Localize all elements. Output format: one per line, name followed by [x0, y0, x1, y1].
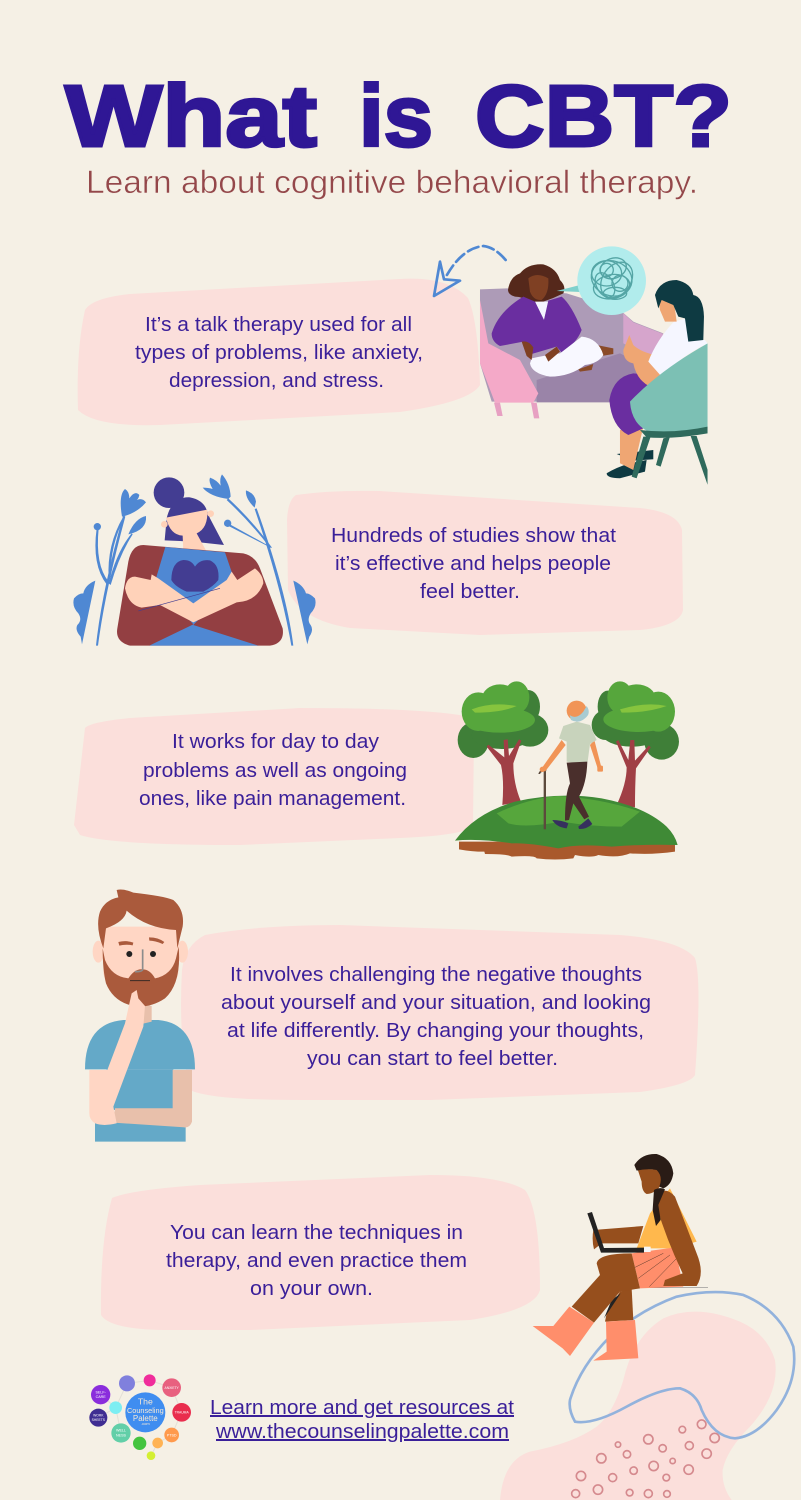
right tree	[592, 681, 679, 807]
title: CBT?	[475, 68, 732, 165]
panel: day to day problems: problems as well as ongoing	[143, 760, 407, 782]
icon: therapy session illustration	[434, 246, 708, 485]
panel: learn techniques	[101, 1175, 540, 1330]
man with cane	[538, 701, 603, 829]
icon: thinking bearded man	[85, 890, 195, 1142]
panel: challenging thoughts: about yourself and your situation, and looking	[221, 992, 651, 1014]
title	[65, 68, 732, 165]
link text: Learn more and get resources at	[210, 1397, 514, 1419]
logo: The Counseling Palette: WORK	[93, 1414, 104, 1418]
plants	[73, 474, 316, 646]
title: is	[359, 68, 433, 165]
subtitle: Learn about cognitive behavioral therapy.	[86, 164, 698, 200]
icon: dashed arrow	[434, 246, 506, 296]
therapist	[607, 280, 708, 485]
panel: effectiveness: feel better.	[420, 581, 520, 603]
left tree	[458, 681, 548, 805]
sofa	[480, 288, 663, 418]
panel: effectiveness: Hundreds of studies show that	[331, 525, 616, 547]
panel: challenging thoughts: It involves challenging the negative thoughts	[230, 964, 642, 986]
panel: day to day problems: ones, like pain management.	[139, 788, 406, 810]
title: What	[65, 68, 317, 165]
decoration: pink blob with loop and circles	[500, 1292, 794, 1500]
icon: elderly man walking in park	[455, 681, 679, 859]
logo: The Counseling Palette	[89, 1374, 191, 1460]
logo: The Counseling Palette: ANXIETY	[165, 1386, 180, 1390]
logo: The Counseling Palette: .com	[141, 1421, 150, 1426]
logo: The Counseling Palette: Counseling	[127, 1406, 164, 1415]
panel: challenging thoughts: at life differently. By changing your thoughts,	[227, 1020, 644, 1042]
panel: day to day problems	[74, 708, 474, 845]
panel: talk therapy: types of problems, like anxiety,	[135, 342, 423, 364]
panel: effectiveness: it’s effective and helps people	[335, 553, 611, 575]
panel: learn techniques: on your own.	[250, 1278, 373, 1300]
logo: The Counseling Palette: NESS	[116, 1433, 127, 1437]
panel: talk therapy: depression, and stress.	[169, 370, 384, 392]
panel: day to day problems: It works for day to day	[172, 731, 379, 753]
woman	[117, 477, 283, 646]
icon: self-hug woman with plants	[73, 474, 316, 646]
logo: The Counseling Palette: WELL	[116, 1429, 126, 1433]
panel: talk therapy: It’s a talk therapy used for all	[145, 314, 412, 336]
panel: learn techniques: You can learn the techniques in	[170, 1222, 463, 1244]
link text: www.thecounselingpalette.com	[215, 1421, 509, 1443]
panel: effectiveness	[287, 491, 683, 635]
logo: The Counseling Palette: SELF-	[95, 1390, 107, 1394]
panel: learn techniques: therapy, and even practice them	[166, 1250, 467, 1272]
logo: The Counseling Palette: PTSD	[167, 1433, 177, 1437]
grassy mound	[455, 796, 678, 859]
icon: woman with laptop	[533, 1154, 708, 1361]
panel: talk therapy	[78, 279, 480, 425]
logo: The Counseling Palette: The	[138, 1396, 153, 1406]
panel: challenging thoughts	[181, 925, 698, 1100]
logo: The Counseling Palette: Palette	[133, 1414, 158, 1423]
logo: The Counseling Palette: TRAUMA	[175, 1411, 189, 1415]
panel: challenging thoughts: you can start to feel better.	[307, 1048, 558, 1070]
logo: The Counseling Palette: SHEETS	[92, 1418, 106, 1422]
thought bubble	[557, 246, 646, 315]
logo: The Counseling Palette: CARE	[96, 1395, 106, 1399]
link text	[210, 1397, 514, 1443]
patient	[492, 264, 613, 377]
